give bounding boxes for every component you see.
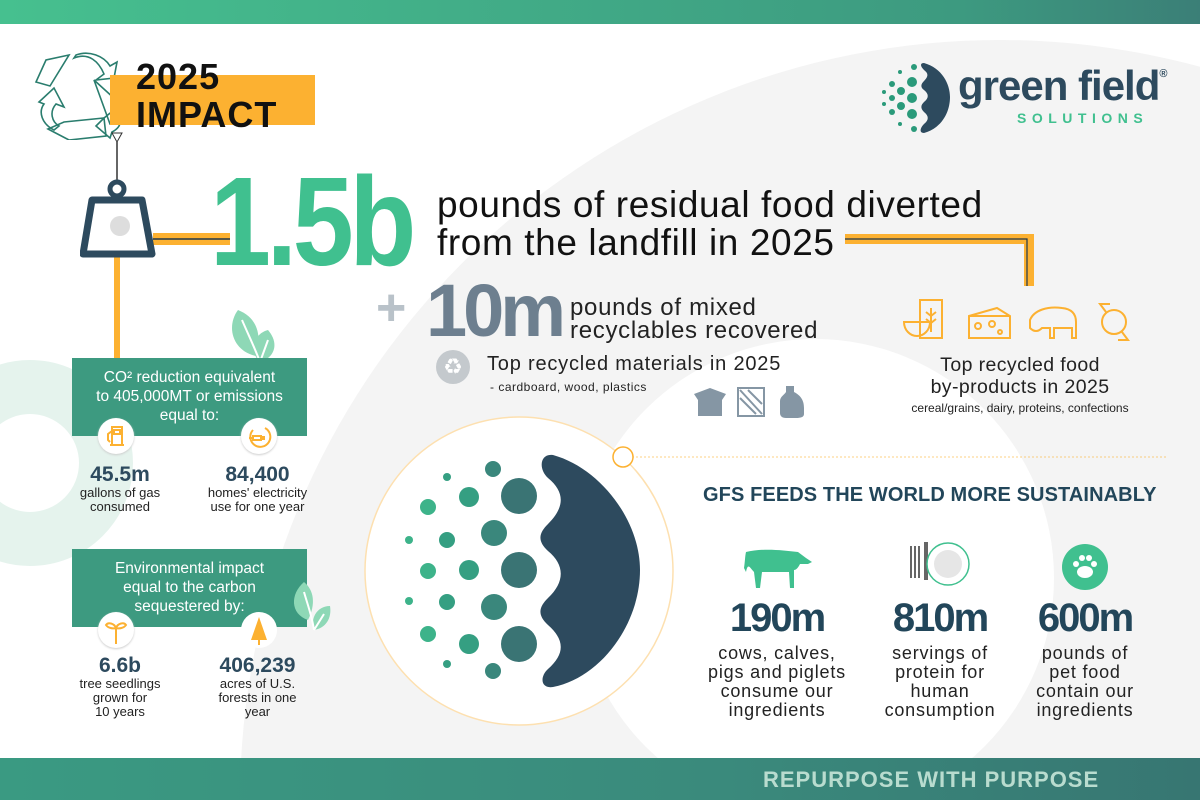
logo: green field solutions <box>882 62 1168 133</box>
stat: 6.6b seedlings: 10 years <box>95 704 145 719</box>
stat: 45.5m gallons: consumed <box>90 499 150 514</box>
icon: tree <box>241 612 277 648</box>
stat: 600m: 600m <box>1038 596 1132 640</box>
bottom bar: tagline <box>0 758 1200 800</box>
icon: weight with connector lines <box>80 132 230 358</box>
panel: carbon sequestered: Environmental impact <box>115 560 264 577</box>
stat: 190m <box>708 596 846 720</box>
top recycled materials <box>436 350 804 418</box>
stat: 84,400 homes: use for one year <box>211 499 304 514</box>
stat: 810m: protein for <box>895 662 985 682</box>
stat: 45.5m gallons: 45.5m <box>90 463 150 486</box>
stat: 6.6b seedlings: 6.6b <box>99 654 141 677</box>
stat: 10m recyclables: pounds of mixed <box>570 294 757 321</box>
stat: 810m: 810m <box>893 596 987 640</box>
text: residual food diverted: from the landfill in 2025 <box>437 222 835 263</box>
stat: 6.6b seedlings: grown for <box>93 690 147 705</box>
icon: gray recycle circle: ♻ <box>443 354 463 379</box>
icon: paw <box>1062 544 1108 590</box>
panel: CO2 reduction: CO² reduction equivalent <box>104 369 275 386</box>
central circle with logo mark <box>364 416 1166 726</box>
icon: leaves bottom <box>294 582 330 630</box>
icon: gas pump <box>98 418 134 454</box>
stat: 810m: human <box>910 681 970 701</box>
stat: 406,239 acres <box>218 654 297 719</box>
panel: CO2 reduction <box>72 358 307 436</box>
orange bracket <box>845 234 1034 286</box>
icon: gray recycle circle <box>436 350 470 384</box>
stat: 6.6b seedlings <box>80 654 160 719</box>
stat: 190m: 190m <box>730 596 824 640</box>
stat: 810m <box>885 596 995 720</box>
stat: 600m: ingredients <box>1037 700 1133 720</box>
icons: box crate jug <box>694 386 804 418</box>
top recycled materials: - cardboard, wood, plastics <box>490 380 647 394</box>
panel: carbon sequestered: sequestered by: <box>134 598 245 615</box>
stat: 600m: contain our <box>1036 681 1134 701</box>
stat: 10m recyclables: recyclables recovered <box>570 317 818 344</box>
text: residual food diverted <box>437 184 983 263</box>
big stat 1.5b: 1.5b <box>210 151 412 292</box>
text: residual food diverted: pounds of residual food diverted <box>437 184 983 225</box>
icon: electricity plug <box>241 418 277 454</box>
top recycled materials: Top recycled materials in 2025 <box>487 353 781 375</box>
title: 2025 IMPACT: IMPACT <box>136 94 277 135</box>
stat: 810m: consumption <box>885 700 995 720</box>
stat: 406,239 acres: 406,239 <box>220 654 295 677</box>
food by-products: Top recycled food <box>940 354 1100 376</box>
panel: CO2 reduction: to 405,000MT or emissions <box>96 388 283 405</box>
stat: 190m: consume our <box>721 681 833 701</box>
stat: 84,400 homes: homes' electricity <box>208 485 307 500</box>
stat: 84,400 homes: 84,400 <box>225 463 290 486</box>
food by-products: cereal/grains, dairy, proteins, confections <box>911 401 1129 415</box>
title: 2025 IMPACT: 2025 <box>136 56 220 97</box>
bottom bar: tagline: REPURPOSE WITH PURPOSE <box>763 767 1099 792</box>
stat: 190m: cows, calves, <box>718 643 836 663</box>
food by-products: by-products in 2025 <box>931 376 1109 398</box>
stat: 84,400 homes <box>208 463 308 514</box>
icon: seedling <box>98 612 134 648</box>
icon: recycle outline <box>34 52 120 140</box>
heading: GFS feeds the world: GFS FEEDS THE WORLD MORE SUSTAINABLY <box>703 484 1157 506</box>
top bar <box>0 0 1200 24</box>
stat: 45.5m gallons: gallons of gas <box>80 485 160 500</box>
stat: 190m: pigs and piglets <box>708 662 846 682</box>
stat: 406,239 acres: forests in one <box>218 690 297 705</box>
stat: 600m: pounds of <box>1042 643 1128 663</box>
stat: 6.6b seedlings: tree seedlings <box>80 676 160 691</box>
title: 2025 IMPACT <box>110 75 315 125</box>
logo: green field solutions: green field® <box>958 62 1166 109</box>
icon: leaves top <box>232 310 274 358</box>
panel: carbon sequestered <box>72 549 307 627</box>
panel: carbon sequestered: equal to the carbon <box>123 579 256 596</box>
stat: 190m: ingredients <box>729 700 825 720</box>
panel: CO2 reduction: equal to: <box>160 407 219 424</box>
stat: 45.5m gallons <box>80 463 160 514</box>
stat: 600m <box>1036 596 1134 720</box>
food by-products <box>903 299 1130 415</box>
icon: plate and cutlery <box>910 542 970 586</box>
stat: 406,239 acres: acres of U.S. <box>220 676 295 691</box>
stat: 10m recyclables: + <box>376 279 406 337</box>
icons: cereal cheese pig candy <box>903 299 1130 341</box>
stat: 600m: pet food <box>1049 662 1121 682</box>
logo: green field solutions: SOLUTIONS <box>1017 110 1148 126</box>
icon: cow <box>744 550 812 588</box>
stat: 810m: servings of <box>892 643 988 663</box>
stat: 406,239 acres: year <box>245 704 270 719</box>
stat: 10m recyclables: 10m <box>426 269 562 352</box>
stat: 10m recyclables <box>376 269 818 352</box>
